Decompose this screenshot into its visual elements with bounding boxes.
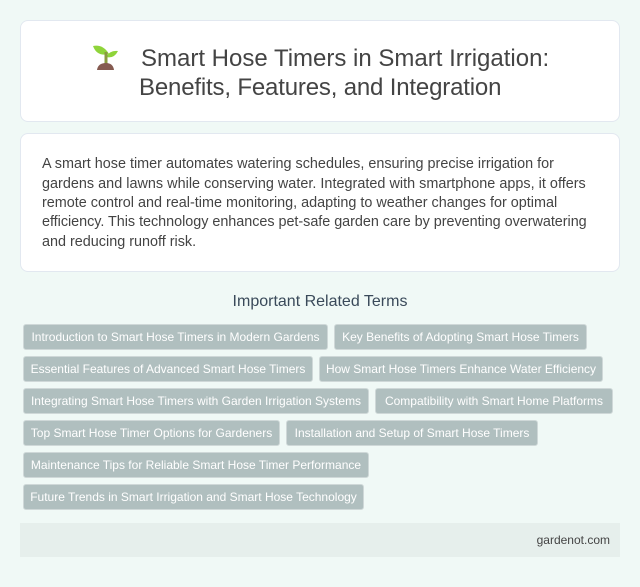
footer [20, 523, 620, 557]
tag list: Integrating Smart Hose Timers with Garden Irrigation Systems [31, 394, 361, 408]
tag list: Key Benefits of Adopting Smart Hose Timers [342, 330, 579, 344]
title: Smart Hose Timers in Smart Irrigation: [141, 45, 549, 72]
tag list: Compatibility with Smart Home Platforms [385, 394, 603, 408]
tag list: Maintenance Tips for Reliable Smart Hose Timer Performance [31, 458, 361, 472]
tag list: Future Trends in Smart Irrigation and Smart Hose Technology [30, 490, 357, 504]
footer: gardenot.com [537, 533, 610, 547]
icon: seedling [93, 46, 118, 70]
text block: description: efficiency. This technology enhances pet-safe garden care by preventing overwatering [42, 214, 587, 230]
text block: description [42, 156, 587, 250]
tag list [23, 324, 613, 510]
tag list: How Smart Hose Timers Enhance Water Efficiency [326, 362, 596, 376]
text block: description: gardens and lawns while conserving water. Integrated with smartphone apps, it offers [42, 176, 586, 192]
tag list: Introduction to Smart Hose Timers in Modern Gardens [31, 330, 320, 344]
tag list: Installation and Setup of Smart Hose Timers [295, 426, 529, 440]
tag list: Top Smart Hose Timer Options for Gardeners [31, 426, 272, 440]
title [139, 45, 549, 101]
heading: related terms: Important Related Terms [233, 293, 407, 310]
panel: title card [20, 20, 620, 122]
tag list: Essential Features of Advanced Smart Hose Timers [31, 362, 305, 376]
text block: description: remote control and real-time monitoring, adapting to weather changes for optimal [42, 195, 557, 211]
panel: description [20, 133, 620, 272]
text block: description: A smart hose timer automates watering schedules, ensuring precise irrigation for [42, 156, 554, 172]
title: Benefits, Features, and Integration [139, 74, 501, 101]
text block: description: and reducing runoff risk. [42, 234, 196, 250]
